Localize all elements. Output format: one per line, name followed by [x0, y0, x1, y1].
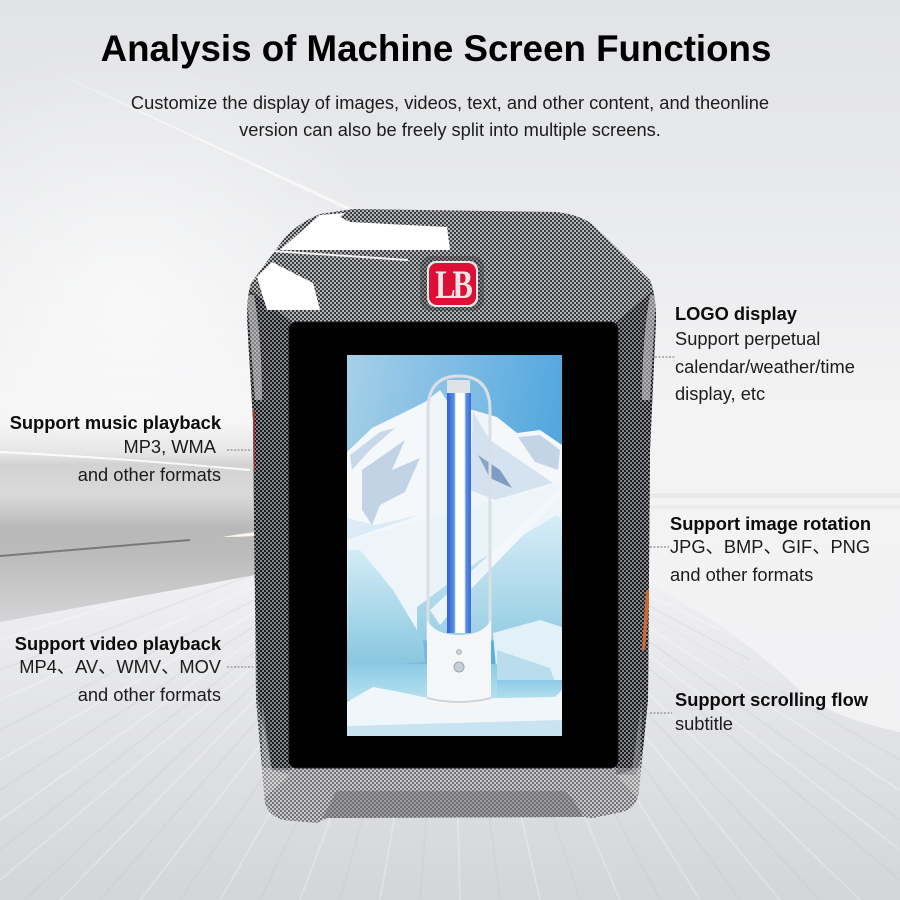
title: Analysis of Machine Screen Functions — [101, 28, 771, 69]
callout: LOGO display — [675, 303, 855, 404]
subtitle: Customize the display of images, videos, text, and other content, and theonline — [131, 92, 769, 113]
callout: LOGO display: calendar/weather/time — [675, 356, 855, 377]
callout: Support image rotation: JPG、BMP、GIF、PNG — [670, 536, 870, 557]
screen image — [347, 355, 562, 736]
callout: Support video playback: MP4、AV、WMV、MOV — [19, 656, 221, 677]
callout: Support image rotation: and other formats — [670, 564, 813, 585]
floor streaks — [0, 576, 900, 900]
callout: LOGO display: display, etc — [675, 383, 765, 404]
logo badge: LB — [435, 262, 472, 307]
glossy highlights — [257, 213, 450, 310]
subtitle — [131, 92, 769, 140]
screen bezel — [289, 322, 618, 768]
callout: Support scrolling flow — [675, 689, 868, 734]
callout: Support scrolling flow: subtitle — [675, 713, 733, 734]
callout: Support video playback: Support video playback — [15, 633, 221, 654]
callout: Support scrolling flow: Support scrolling flow — [675, 689, 868, 710]
callout: Support image rotation: Support image rotation — [670, 513, 871, 534]
callout: LOGO display: Support perpetual — [675, 328, 820, 349]
callout: Support music playback — [10, 412, 221, 485]
product: tower device — [427, 376, 491, 709]
callout: Support music playback: and other formats — [78, 464, 221, 485]
subtitle: version can also be freely split into multiple screens. — [239, 119, 661, 140]
callout: Support music playback: Support music playback — [10, 412, 221, 433]
mountains — [347, 390, 562, 540]
callout: LOGO display: LOGO display — [675, 303, 797, 324]
callout: Support video playback — [15, 633, 221, 705]
machine body — [247, 209, 656, 828]
callout: Support music playback: MP3, WMA — [123, 436, 216, 457]
logo badge — [420, 256, 484, 311]
callout: Support video playback: and other formats — [78, 684, 221, 705]
callout: Support image rotation — [670, 513, 871, 585]
